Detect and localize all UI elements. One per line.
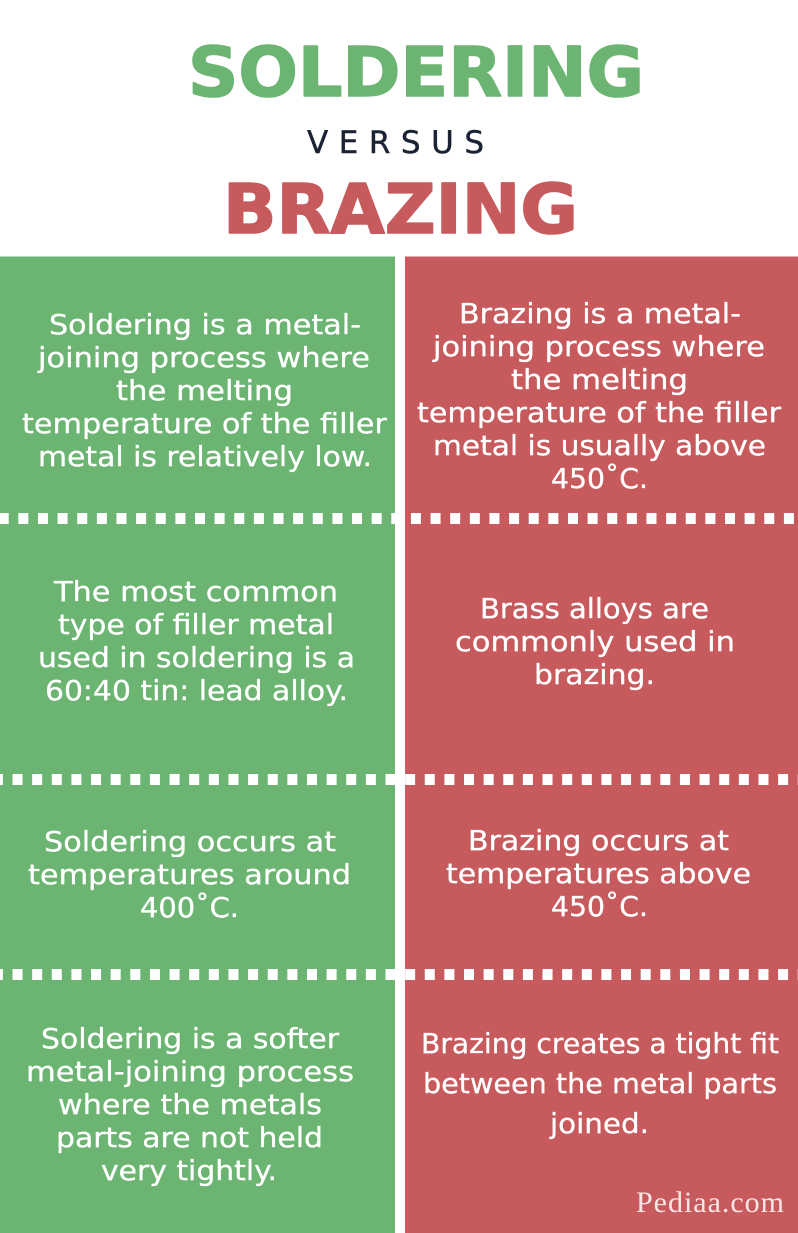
panel: soldering column [0, 256, 395, 1233]
text: brazing joint strength: between the metal parts [423, 1067, 777, 1100]
text: soldering joint strength: where the metals [58, 1088, 322, 1121]
text: brazing filler metal [455, 592, 735, 691]
text: brazing joint strength: joined. [549, 1107, 649, 1140]
text: soldering temperature: temperatures around [28, 858, 351, 891]
subtitle: versus: VERSUS [307, 125, 484, 161]
text: soldering temperature: 400˚C. [140, 891, 239, 924]
text: brazing definition: metal is usually above [433, 429, 766, 462]
text: brazing temperature: temperatures above [446, 857, 751, 890]
text: brazing filler metal: commonly used in [455, 625, 735, 658]
text: brazing definition: the melting [511, 363, 688, 396]
text: soldering temperature: Soldering occurs at [44, 825, 336, 858]
text: soldering joint strength: Soldering is a softer [41, 1022, 340, 1055]
title: soldering: SOLDERING [188, 33, 644, 113]
text: soldering joint strength: parts are not held [56, 1121, 323, 1154]
text: brazing definition: Brazing is a metal- [459, 297, 741, 330]
text: soldering definition: metal is relatively low. [38, 440, 372, 473]
panel: brazing column [405, 256, 798, 1233]
text: soldering joint strength: very tightly. [101, 1154, 277, 1187]
text: soldering definition: joining process where [37, 341, 370, 374]
text: soldering filler metal: The most common [53, 575, 338, 608]
title: brazing: BRAZING [223, 170, 578, 250]
text: soldering filler metal: used in soldering is a [38, 641, 355, 674]
watermark: Pediaa.com: Pediaa.com [636, 1186, 784, 1219]
text: soldering filler metal: type of filler metal [58, 608, 334, 641]
text: brazing joint strength [421, 1027, 779, 1140]
text: brazing filler metal: Brass alloys are [480, 592, 709, 625]
text: brazing definition: temperature of the filler [417, 396, 782, 429]
text: soldering temperature [28, 825, 351, 924]
text: soldering joint strength [26, 1022, 354, 1187]
text: brazing definition: joining process where [432, 330, 765, 363]
text: soldering joint strength: metal-joining process [26, 1055, 354, 1088]
text: soldering filler metal [38, 575, 355, 707]
text: brazing definition [417, 297, 782, 495]
text: soldering definition [22, 308, 388, 473]
text: brazing filler metal: brazing. [534, 658, 655, 691]
text: soldering definition: Soldering is a metal- [49, 308, 361, 341]
text: soldering filler metal: 60:40 tin: lead alloy. [45, 674, 348, 707]
text: soldering definition: the melting [116, 374, 293, 407]
text: brazing joint strength: Brazing creates a tight fit [421, 1027, 779, 1060]
text: brazing temperature: 450˚C. [551, 890, 648, 923]
text: brazing definition: 450˚C. [551, 462, 648, 495]
text: brazing temperature: Brazing occurs at [468, 824, 729, 857]
text: brazing temperature [446, 824, 751, 923]
text: soldering definition: temperature of the filler [22, 407, 388, 440]
